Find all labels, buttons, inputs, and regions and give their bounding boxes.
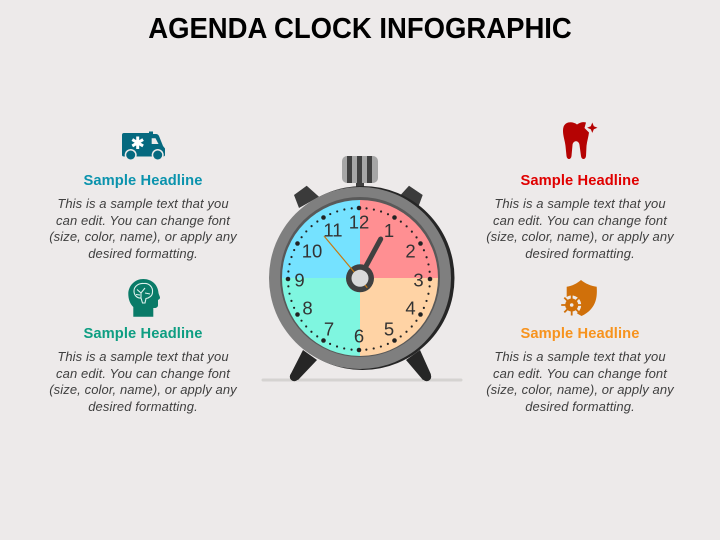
text block: red headline top right	[486, 173, 674, 261]
clock body	[270, 186, 454, 370]
icon: head with brain	[128, 279, 160, 317]
hour numerals: 8	[302, 298, 313, 318]
text block: orange headline bottom right	[486, 326, 674, 414]
hour numerals: 2	[405, 240, 416, 262]
ground shadow	[262, 378, 462, 382]
icon: shield with virus	[561, 280, 597, 316]
text block: teal-blue headline top left: Sample Headline	[83, 173, 203, 189]
hour numerals: 12	[349, 212, 369, 232]
minute dots	[288, 208, 430, 350]
text block: orange headline bottom right: desired formatting.	[525, 399, 635, 414]
hour numerals: 9	[294, 270, 305, 290]
text block: green headline bottom left: This is a sample text that you	[57, 349, 229, 364]
hour numerals: 7	[324, 318, 334, 340]
alarm buttons	[294, 186, 423, 208]
clock legs	[290, 350, 431, 381]
second hand	[324, 236, 367, 288]
hour hand	[365, 239, 381, 268]
text block: green headline bottom left: (size, color, name), or apply any	[49, 382, 237, 397]
alarm clock	[262, 156, 462, 382]
text block: orange headline bottom right: Sample Headline	[520, 326, 640, 342]
hour numerals: 10	[302, 240, 322, 262]
hour numerals: 6	[354, 326, 364, 346]
hour numerals: 3	[413, 270, 424, 290]
text block: green headline bottom left: desired formatting.	[88, 399, 198, 414]
text block: teal-blue headline top left	[49, 173, 238, 261]
icon: ambulance	[122, 132, 165, 161]
text block: green headline bottom left: Sample Headline	[83, 326, 203, 342]
text block: teal-blue headline top left: desired formatting.	[88, 246, 198, 261]
hour numerals: 4	[405, 298, 416, 318]
icon: tooth with sparkle	[563, 122, 598, 159]
hub centre	[352, 270, 368, 287]
text block: orange headline bottom right: (size, color, name), or apply any	[486, 382, 674, 397]
text block: teal-blue headline top left: can edit. You can change font	[56, 213, 230, 228]
text block: red headline top right: This is a sample text that you	[494, 196, 666, 211]
title: AGENDA CLOCK INFOGRAPHIC	[148, 13, 572, 45]
top knob	[342, 156, 378, 190]
text block: red headline top right: Sample Headline	[520, 173, 640, 189]
hub ring	[346, 264, 374, 292]
text block: orange headline bottom right: This is a sample text that you	[494, 349, 666, 364]
text block: red headline top right: can edit. You can change font	[493, 213, 667, 228]
text block: teal-blue headline top left: (size, color, name), or apply any	[49, 229, 237, 244]
text block: green headline bottom left: can edit. You can change font	[56, 366, 230, 381]
text block: teal-blue headline top left: This is a sample text that you	[57, 196, 229, 211]
dial quadrants	[282, 200, 438, 356]
hour numerals	[294, 212, 424, 346]
hour numerals: 5	[384, 318, 394, 340]
hour numerals: 11	[323, 220, 343, 240]
text block: orange headline bottom right: can edit. You can change font	[493, 366, 667, 381]
hour numerals: 1	[384, 220, 394, 241]
text block: red headline top right: desired formatting.	[525, 246, 635, 261]
text block: red headline top right: (size, color, name), or apply any	[486, 229, 674, 244]
hour dots	[286, 206, 432, 352]
text block: green headline bottom left	[49, 326, 238, 414]
